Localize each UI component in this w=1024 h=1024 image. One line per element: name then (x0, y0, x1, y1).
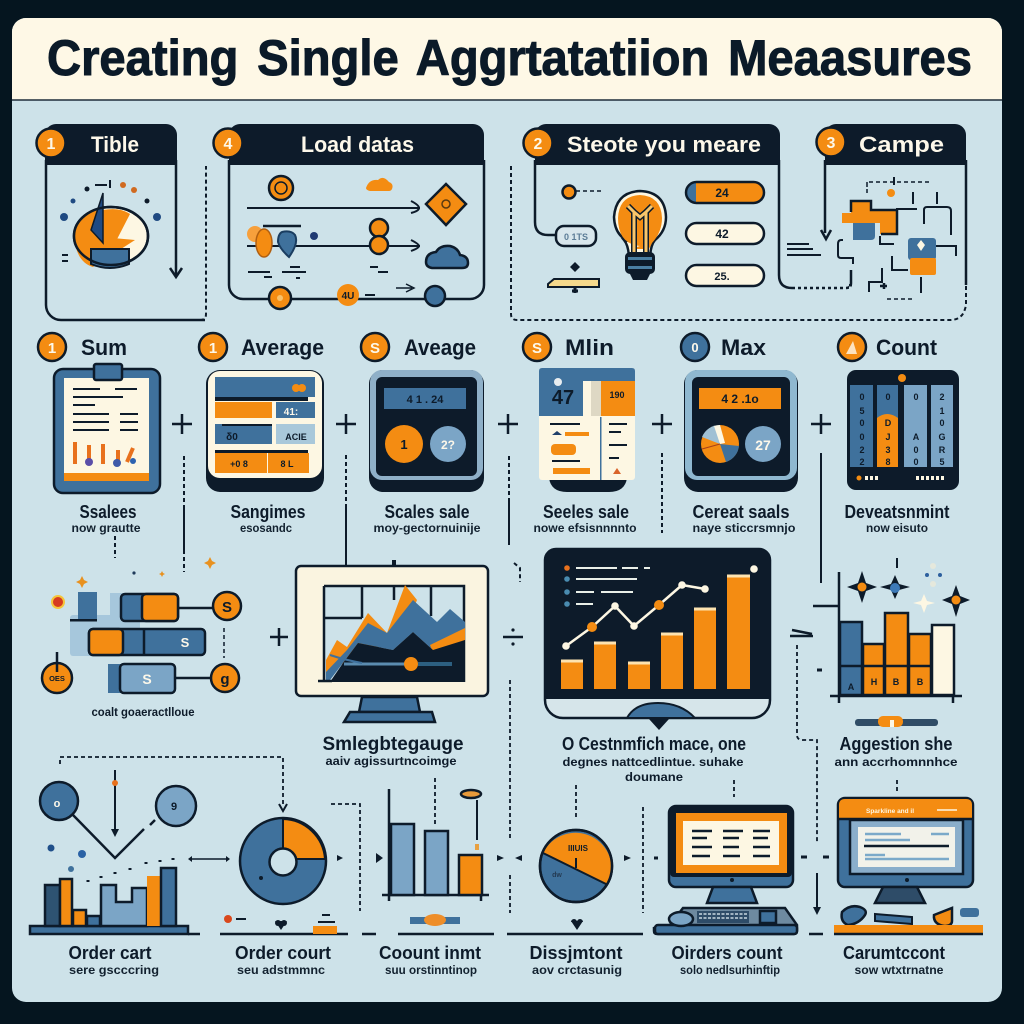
group: linked step boxes (42, 592, 241, 719)
icon: clipboard (54, 364, 160, 493)
donut chart (240, 818, 326, 904)
badge: 1 (209, 340, 217, 357)
icon: dashboard card: 47 (552, 387, 574, 409)
title: Creating Single Aggrtatatiion Meaasures (47, 30, 972, 86)
panel: compare (787, 124, 966, 299)
icon: column display: 1 (939, 406, 945, 416)
step: Aveage (361, 333, 484, 535)
funnel icon (40, 770, 196, 882)
sub caption: ann accrhomnnhce (834, 755, 958, 769)
bar chart with stars (813, 558, 970, 769)
sub caption: nowe efsisnnnnto (534, 521, 636, 535)
label: Mlin (565, 335, 614, 360)
icon: column display: 0 (913, 457, 919, 467)
icon: column display: 8 (885, 457, 891, 467)
desk objects (834, 906, 983, 934)
sub caption: moy-gectornuinije (374, 521, 481, 535)
baseline rules (188, 933, 823, 935)
panel header: Steote you meare (524, 124, 780, 165)
icon: data table: ACIE (285, 432, 307, 442)
value pills: 24 (715, 186, 729, 200)
caption: Ssalees (80, 502, 136, 522)
caption: Deveatsnmint (844, 502, 950, 522)
panel header: Load datas: Load datas (301, 132, 414, 157)
panel: load data (214, 124, 484, 309)
icon: data table (206, 370, 324, 492)
panel header: Tible (36, 124, 177, 165)
sub caption: aaiv agissurtncoimge (326, 754, 457, 768)
icon: calculator (369, 370, 484, 492)
caption: Smlegbtegauge (322, 734, 464, 755)
label: Max (721, 335, 767, 360)
caption: Coount inmt (379, 943, 481, 963)
caption: coalt goaeractlloue (92, 707, 194, 719)
flow lines and nodes (247, 176, 468, 309)
icon: calculator: 1 (400, 437, 408, 452)
bar chart with stars: B (917, 677, 924, 687)
divide operator (503, 628, 523, 646)
label: Sum (81, 335, 127, 360)
sub caption: aov crctasunig (532, 963, 622, 977)
icon: column display: A (913, 432, 920, 442)
sub caption: solo nedlsurhinftip (680, 963, 780, 977)
plus operator (270, 628, 288, 646)
funnel icon: 9 (171, 801, 177, 813)
icon: column display: 2 (859, 445, 865, 455)
badge (38, 333, 66, 361)
caption: Oirders count (672, 943, 782, 963)
panel: table (36, 124, 206, 320)
caption: Sangimes (230, 502, 306, 522)
slider (410, 914, 460, 926)
bars (561, 576, 750, 689)
label: Aveage (404, 335, 476, 360)
badge: 1 (48, 340, 56, 357)
item: Carumtccont (834, 798, 983, 977)
icon: column display: 3 (885, 445, 891, 455)
badge (361, 333, 389, 361)
icon: column display: 5 (939, 457, 945, 467)
heart marker (571, 919, 583, 930)
icon: calculator with pie (684, 370, 798, 492)
item: Orders count (654, 806, 797, 977)
icon: data table: 8 L (280, 459, 294, 469)
icon: dashboard card (539, 368, 635, 492)
badge (838, 333, 866, 361)
sub caption: now grautte (72, 521, 141, 535)
caption: Order court (235, 943, 331, 963)
icon: calculator with pie: 27 (755, 437, 771, 453)
flow lines and nodes: 4U (342, 291, 354, 302)
bar chart with stars: A (848, 682, 855, 692)
monitor with browser: Sparkline and il (866, 808, 914, 815)
sub caption: sow wtxtrnatne (854, 963, 944, 977)
sub caption: now eisuto (866, 521, 928, 535)
icon: network blocks (838, 177, 956, 299)
line series (562, 565, 758, 650)
badge (523, 333, 551, 361)
caption: Carumtccont (843, 943, 945, 963)
step: Count (838, 333, 959, 535)
funnel icon: o (54, 798, 61, 810)
icon: calculator: 4 1 . 24 (407, 394, 444, 406)
caption: O Cestnmfich mace, one (562, 734, 746, 754)
equals operator (790, 630, 813, 636)
icon: calculator with pie: 4 2 .1o (721, 392, 759, 406)
dashboard screen with bars and line (545, 549, 770, 784)
panel header: Tible: Tible (91, 132, 139, 157)
panel header: Load datas: 4 (224, 136, 233, 153)
left controls: 0 1TS (564, 232, 588, 242)
monitor with browser (838, 798, 973, 903)
icon: column display: 0 (885, 392, 891, 402)
dashed connectors in lower section (60, 645, 897, 915)
icon: column display: 0 (913, 445, 919, 455)
left controls (548, 186, 602, 293)
bar chart with stars: H (871, 677, 877, 687)
sub caption: sere gscccring (69, 963, 159, 977)
panel: state your measure (511, 124, 966, 320)
step: Min (523, 333, 636, 535)
badge (681, 333, 709, 361)
panel header: Campe (816, 124, 966, 165)
value pills: 42 (715, 227, 729, 241)
icon: column display: R (939, 445, 946, 455)
caption: Aggestion she (840, 734, 952, 754)
badge: 0 (691, 340, 699, 355)
sub caption: suu orstinntinop (385, 963, 477, 977)
pie chart (540, 830, 612, 902)
icon: data table: +0 8 (230, 459, 248, 469)
icon: column display: 2 (939, 392, 945, 402)
sub caption: naye sticcrsmnjo (692, 521, 796, 535)
group: linked step boxes: g (220, 671, 230, 688)
panel header: Steote you meare: Steote you meare (567, 132, 761, 157)
badge: S (370, 340, 380, 357)
icon: column display: 0 (939, 418, 945, 428)
caption: Cereat saals (692, 502, 790, 522)
title banner (12, 18, 1002, 100)
item: Order court (224, 818, 337, 977)
icon: column display: 0 (859, 432, 865, 442)
pie chart: IIIUIS (568, 844, 589, 853)
group: linked step boxes: S (181, 635, 190, 650)
icon: data table: δ0 (226, 432, 238, 443)
desktop computer (654, 806, 797, 934)
badge: S (532, 340, 542, 357)
group: linked step boxes: S (142, 671, 152, 687)
icon: column display: 2 (859, 457, 865, 467)
group: linked step boxes: S (222, 599, 232, 616)
monitor with area chart (296, 566, 488, 768)
badge (199, 333, 227, 361)
pie chart: dw (552, 872, 562, 879)
caption: Dissjmtont (530, 943, 622, 963)
plus operators (172, 414, 831, 434)
icon: dashboard card: 190 (609, 390, 625, 400)
panel header: Tible: 1 (47, 136, 56, 153)
bar chart (382, 789, 489, 901)
icon: pie chart (60, 180, 161, 268)
caption: Order cart (68, 943, 152, 963)
icon: light bulb (614, 191, 666, 280)
connectors between rows (76, 453, 821, 588)
caption: Seeles sale (543, 502, 629, 522)
panel header: Campe: 3 (827, 135, 836, 152)
step: Average (199, 333, 324, 535)
icon: calculator: 2? (441, 438, 455, 452)
caption: Scales sale (384, 502, 470, 522)
sub caption: seu adstmmnc (237, 963, 325, 977)
panel header: Campe: Campe (859, 132, 944, 157)
legend (564, 565, 650, 607)
step: Max (681, 333, 798, 535)
item: Order cart (30, 770, 196, 977)
small text lines (787, 244, 821, 255)
icon: column display: J (885, 432, 891, 442)
item: Dissjmtont (530, 830, 622, 977)
icon: column display (847, 370, 959, 490)
icon: column display: 0 (859, 418, 865, 428)
panel header: Steote you meare: 2 (534, 136, 543, 153)
icon: data table: 41: (284, 407, 298, 418)
step: Sum (38, 333, 160, 535)
item: Count inmt (379, 789, 489, 977)
icon: column display: G (938, 432, 946, 442)
icon: column display: 0 (859, 392, 865, 402)
panel header: Load datas (214, 124, 484, 165)
icon: column display: D (885, 418, 892, 428)
small markers (224, 915, 337, 934)
sub caption: degnes nattcedlintue. suhake (562, 755, 744, 769)
sub caption line 2: doumane (625, 770, 683, 784)
value pills (686, 182, 764, 286)
icon: column display: 0 (913, 392, 919, 402)
label: Count (876, 335, 938, 360)
slider (855, 716, 938, 727)
sub caption: esosandc (240, 521, 292, 535)
stars (847, 558, 970, 617)
bar icon (30, 868, 188, 934)
icon: column display: 5 (859, 406, 865, 416)
label: Average (241, 335, 324, 360)
group: linked step boxes: OES (49, 674, 65, 683)
bar chart with stars: B (893, 677, 900, 687)
value pills: 25. (714, 271, 730, 283)
